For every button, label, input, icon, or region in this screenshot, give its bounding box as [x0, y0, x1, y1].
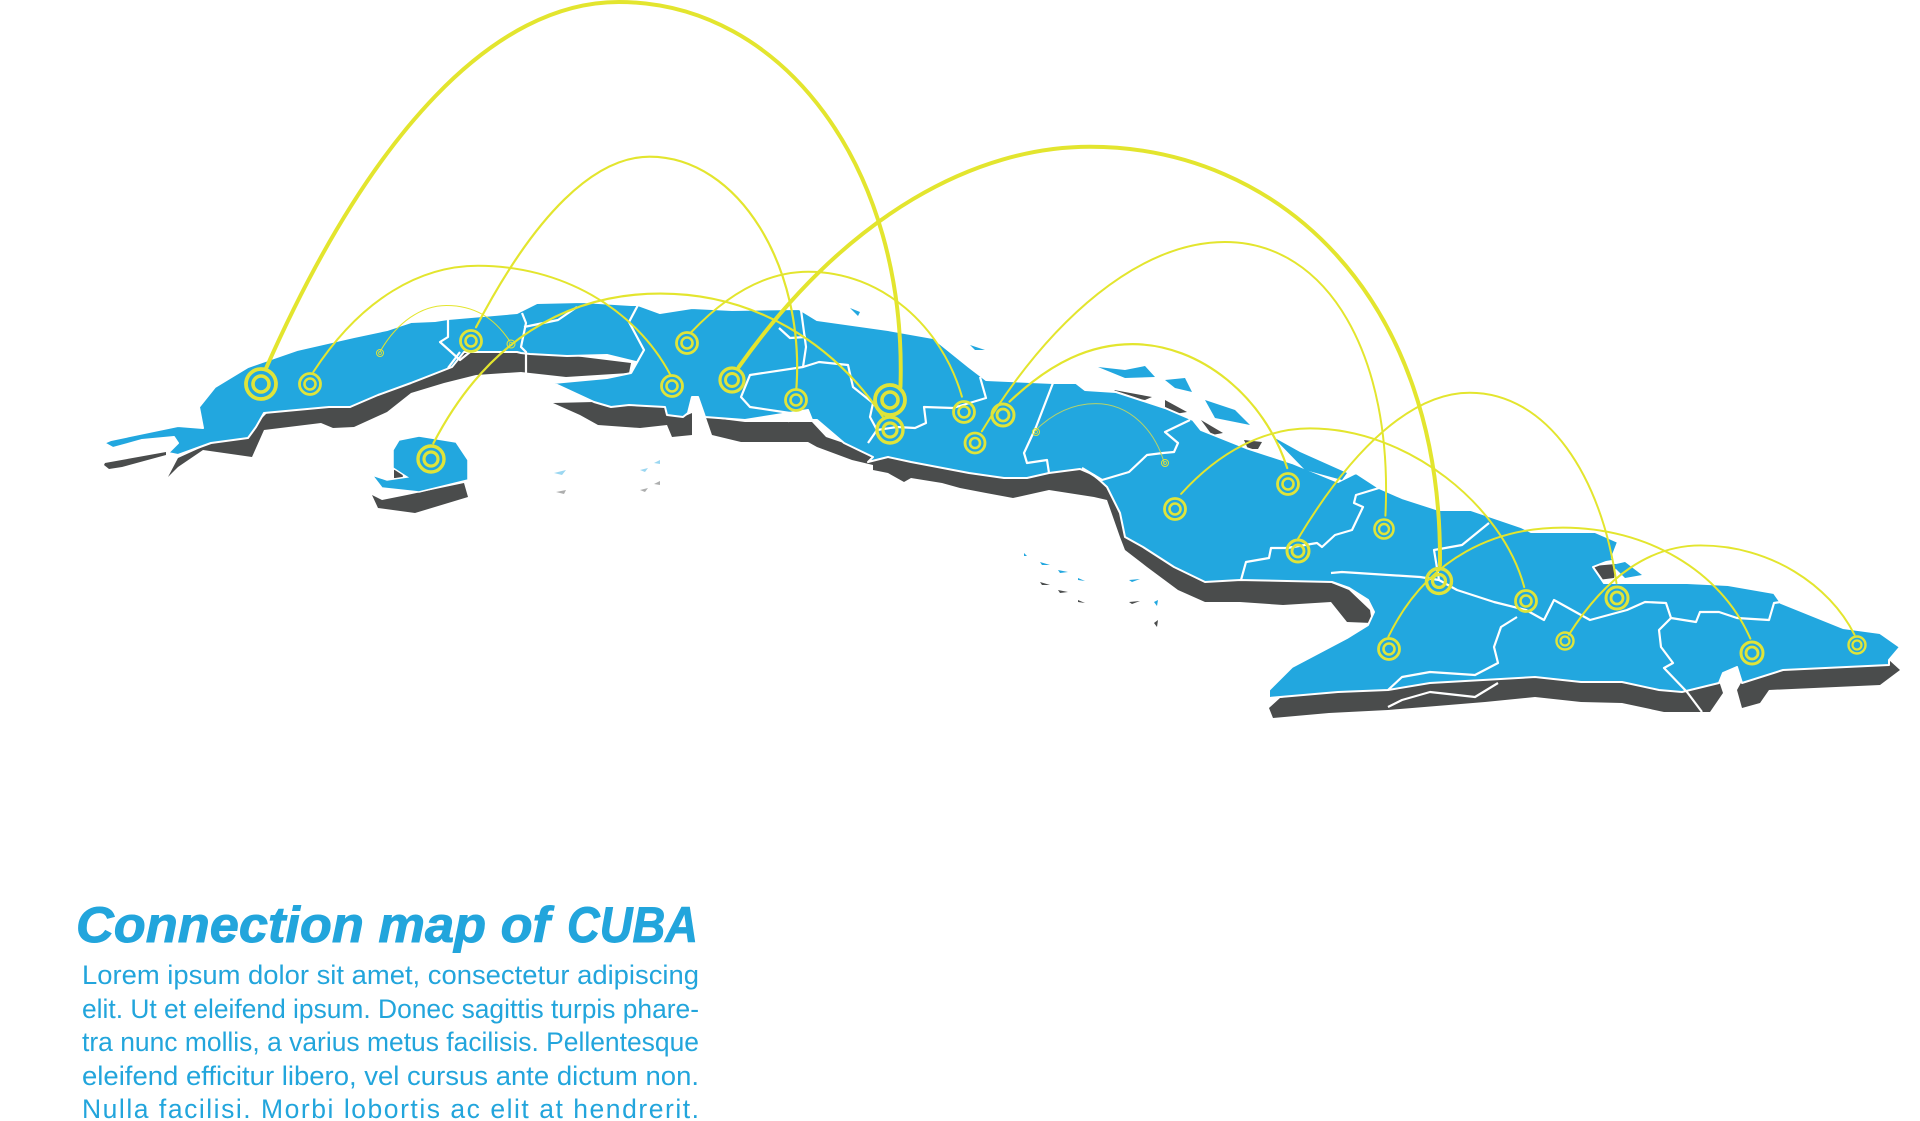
- marker 11: [875, 385, 905, 415]
- marker 12: [877, 417, 903, 443]
- body text: elit. Ut et eleifend ipsum. Donec sagittis turpis phare-: [82, 994, 699, 1024]
- arc: marker 15 to marker 20: [982, 242, 1386, 516]
- arc: marker 21 to marker 24: [1298, 393, 1616, 583]
- arc: marker 25 to marker 27: [1388, 528, 1750, 639]
- marker 1: [246, 369, 276, 399]
- main island of Cuba: [104, 302, 1900, 698]
- arc: marker 18 to marker 23: [1181, 428, 1524, 587]
- marker 19: [1278, 474, 1298, 494]
- marker 20: [1374, 520, 1394, 538]
- arc: west to Havana region, tallest: [266, 2, 901, 387]
- map of Cuba: [104, 302, 1900, 718]
- marker 10: [786, 390, 806, 410]
- title: Connection map of: [76, 897, 555, 953]
- arc: Isla de la Juventud to centre: [433, 294, 883, 443]
- marker 18: [1164, 498, 1186, 520]
- marker 27: [1741, 642, 1763, 664]
- connection arcs: [266, 2, 1854, 639]
- arc: second tall arc across centre: [739, 147, 1440, 565]
- marker 4: [460, 330, 482, 352]
- arc: marker 8 to marker 13: [691, 272, 962, 397]
- northern cays: [554, 308, 1642, 606]
- body text: Lorem ipsum dolor sit amet, consectetur adipiscing: [82, 960, 699, 990]
- marker 13: [954, 402, 974, 422]
- marker 2: [300, 374, 320, 394]
- arc: marker 4 to marker 10: [476, 157, 797, 389]
- map extrusion: dark south-coast shadow: [104, 353, 1900, 718]
- marker 3: [376, 350, 384, 356]
- marker 24: [1606, 587, 1628, 609]
- body text: eleifend efficitur libero, vel cursus ante dictum non.: [82, 1061, 699, 1091]
- marker 17: [1162, 460, 1168, 466]
- marker 14: [992, 404, 1014, 426]
- body text: [82, 960, 699, 1121]
- marker 22: [1426, 568, 1452, 594]
- province borders: [440, 305, 1781, 712]
- Isla de la Juventud: [372, 436, 468, 492]
- body text: tra nunc mollis, a varius metus facilisis. Pellentesque: [82, 1027, 699, 1057]
- arc: small central arc: [1034, 404, 1164, 463]
- marker 6: [418, 446, 444, 472]
- marker 5: [507, 340, 515, 348]
- arc: marker 26 to marker 28: [1569, 545, 1854, 635]
- marker 25: [1378, 638, 1400, 660]
- marker 15: [965, 433, 985, 453]
- marker 21: [1287, 540, 1309, 562]
- arc: small western arc: [380, 305, 510, 352]
- arc: marker 14 to marker 19: [1010, 344, 1287, 468]
- marker 26: [1556, 632, 1574, 650]
- marker 16: [1032, 428, 1040, 436]
- marker 8: [676, 332, 698, 354]
- marker 28: [1848, 636, 1866, 654]
- title: CUBA: [567, 897, 698, 953]
- marker 9: [720, 368, 744, 392]
- arc: marker 2 to marker 7: [313, 266, 670, 375]
- marker 23: [1516, 590, 1536, 612]
- marker 7: [662, 376, 682, 396]
- location markers: [246, 330, 1866, 664]
